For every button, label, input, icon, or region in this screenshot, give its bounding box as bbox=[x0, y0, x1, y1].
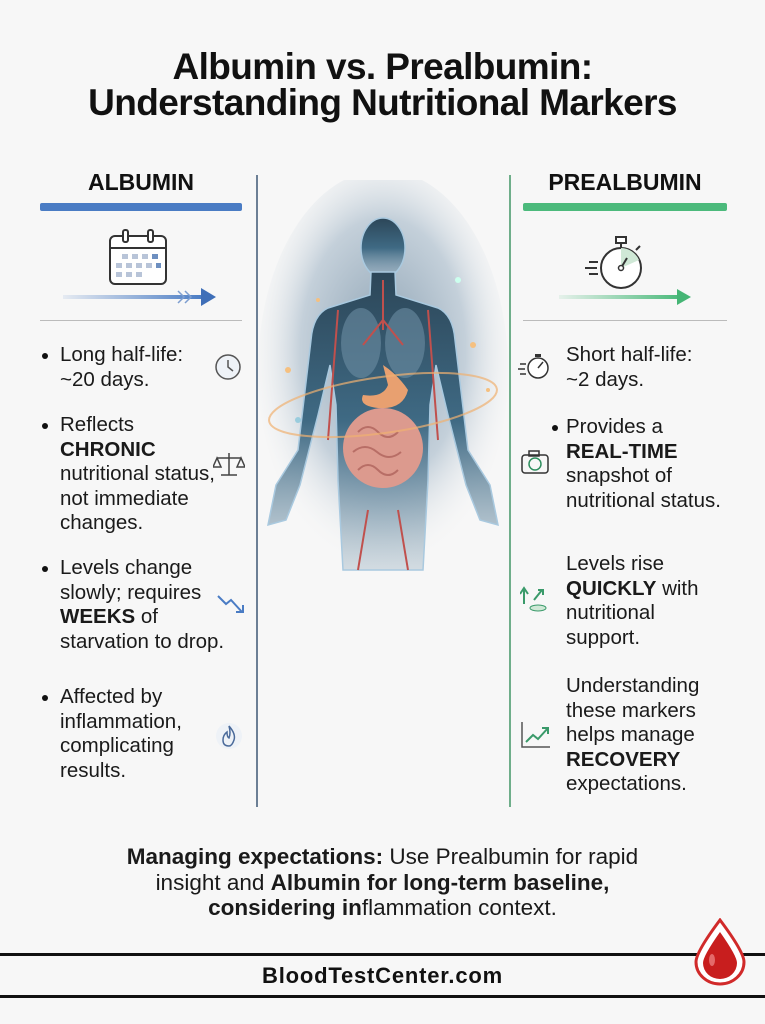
bullet: quickly: nutritional bbox=[566, 601, 655, 624]
bullet: weeks: starvation to drop. bbox=[60, 630, 224, 652]
bullet: chronic: nutritional status, bbox=[60, 462, 215, 485]
panel: albumin bullets: changes. bbox=[60, 511, 143, 534]
bullet: recovery bbox=[521, 674, 699, 795]
bullet: real-time: Provides a bbox=[566, 415, 663, 438]
bullet: short half-life bbox=[518, 343, 692, 390]
icon: scales bbox=[213, 453, 245, 476]
title: Understanding Nutritional Markers bbox=[88, 82, 677, 123]
bullet: recovery: these markers bbox=[566, 698, 696, 722]
icon: up arrows bbox=[520, 586, 546, 612]
bullet: chronic: Reflects bbox=[60, 413, 134, 436]
bullet: inflammation: results. bbox=[60, 758, 126, 782]
icon: flame bbox=[216, 723, 242, 749]
orbit bbox=[265, 361, 501, 449]
bullet: chronic: not immediate bbox=[60, 486, 189, 510]
lungs bbox=[341, 308, 381, 378]
summary text: considering inflammation context. bbox=[208, 895, 557, 920]
bullet: inflammation: complicating bbox=[60, 734, 174, 757]
bullet: quickly: Levels rise bbox=[566, 552, 664, 575]
bullet: weeks: WEEKS of bbox=[60, 605, 158, 628]
icon: stopwatch small bbox=[518, 354, 549, 379]
blue bar bbox=[40, 203, 242, 211]
body bbox=[361, 218, 405, 278]
heading: albumin: ALBUMIN bbox=[88, 169, 194, 195]
icon: blood drop bbox=[694, 918, 746, 986]
divider lines bbox=[256, 175, 258, 807]
bullet: recovery: expectations. bbox=[566, 772, 687, 795]
bullet: real-time: nutritional status. bbox=[566, 488, 721, 512]
icon: down trend bbox=[217, 595, 244, 613]
summary text bbox=[127, 844, 638, 920]
icon: calendar bbox=[109, 229, 167, 285]
arrow: fast bbox=[559, 289, 691, 305]
icon: stopwatch bbox=[585, 236, 642, 289]
heading: prealbumin: PREALBUMIN bbox=[548, 169, 702, 195]
bullet: inflammation: inflammation, bbox=[60, 710, 182, 732]
bullet: chronic bbox=[42, 413, 245, 534]
icon: camera bbox=[521, 450, 549, 474]
icon: clock bbox=[215, 354, 241, 380]
bullet: recovery: helps manage bbox=[566, 723, 695, 746]
bullet: half-life: Long half-life: bbox=[60, 343, 183, 366]
bullet: real-time bbox=[521, 415, 721, 512]
panel: albumin header bbox=[40, 169, 242, 321]
illustration: human body bbox=[267, 180, 499, 571]
title bbox=[88, 46, 677, 123]
intestines bbox=[343, 408, 423, 488]
bullet: inflammation bbox=[42, 685, 242, 782]
bullet: chronic: CHRONIC bbox=[60, 438, 156, 460]
footer text: BloodTestCenter.com bbox=[262, 963, 503, 988]
bullet: quickly: QUICKLY with bbox=[566, 576, 699, 600]
bullet: short half-life: ~2 days. bbox=[566, 368, 644, 390]
bullet: short half-life: Short half-life: bbox=[566, 343, 692, 366]
bullet: weeks: slowly; requires bbox=[60, 580, 201, 604]
arrow: slow bbox=[63, 288, 216, 306]
panel: albumin bullets bbox=[42, 343, 245, 782]
panel: prealbumin header bbox=[523, 169, 727, 321]
bullet: recovery: RECOVERY bbox=[566, 748, 680, 770]
bullet: weeks: Levels change bbox=[60, 556, 192, 579]
bullet: half-life bbox=[42, 343, 241, 390]
panel: prealbumin bullets bbox=[518, 343, 721, 795]
bullet: inflammation: Affected by bbox=[60, 685, 162, 708]
stomach bbox=[362, 365, 408, 408]
bullet: weeks bbox=[42, 556, 244, 652]
bullet: recovery: Understanding bbox=[566, 674, 699, 697]
summary text: Managing expectations: Use Prealbumin for rapid bbox=[127, 844, 638, 869]
bullet: real-time: REAL-TIME bbox=[566, 440, 678, 462]
green bar bbox=[523, 203, 727, 211]
bullet: quickly bbox=[520, 552, 699, 648]
bullet: real-time: snapshot of bbox=[566, 464, 672, 487]
bullet: quickly: support. bbox=[566, 626, 640, 648]
summary text: insight and Albumin for long-term baseline, bbox=[156, 870, 609, 894]
icon: chart up bbox=[521, 722, 550, 748]
bullet: half-life: ~20 days. bbox=[60, 368, 149, 390]
title: Albumin vs. Prealbumin: bbox=[172, 46, 592, 87]
